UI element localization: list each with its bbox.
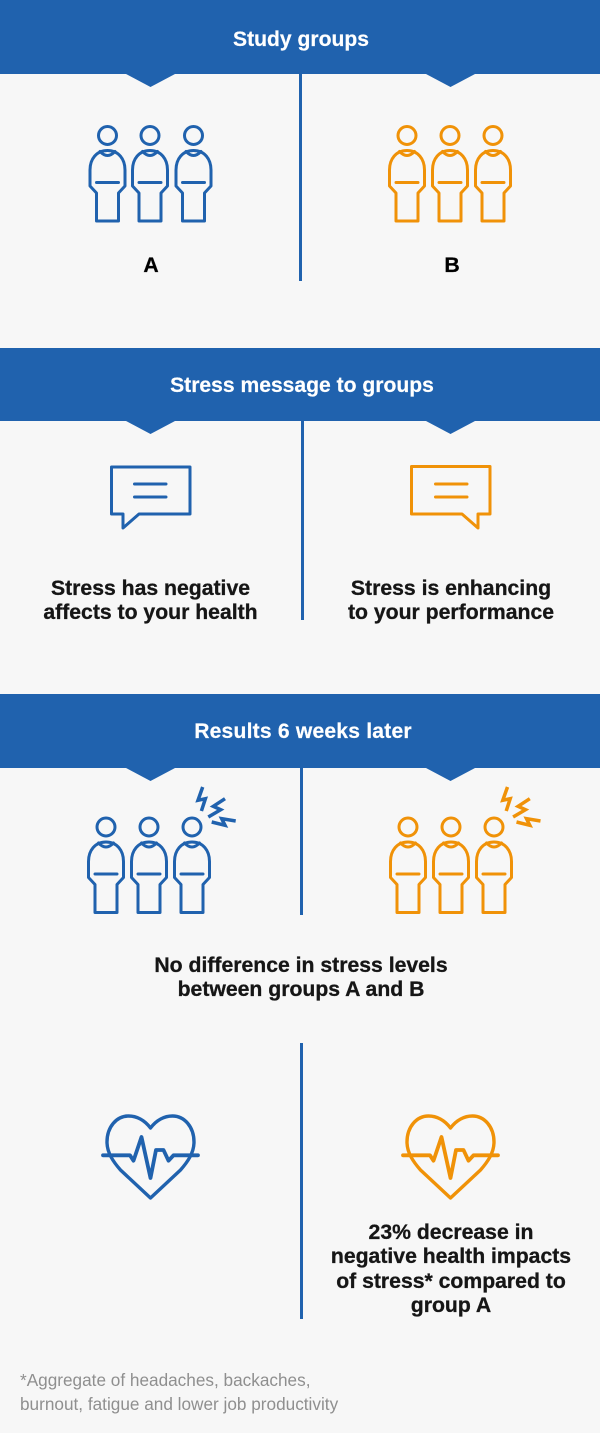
pointer: message B (426, 421, 475, 434)
icon: message bubble B (412, 466, 490, 528)
icon: group B people (390, 126, 510, 221)
header band: results (0, 694, 600, 768)
icon: results B people with stress bolts (390, 787, 540, 912)
header band: results: Results 6 weeks later (194, 720, 412, 743)
icon: results A people with stress bolts (88, 787, 236, 912)
text: health result: negative health impacts (331, 1245, 571, 1268)
header band: study groups (0, 0, 600, 74)
text: no difference: between groups A and B (178, 978, 424, 1001)
header band: stress message: Stress message to groups (170, 374, 434, 397)
header band: study groups: Study groups (233, 28, 369, 51)
text: health result: group A (411, 1294, 491, 1317)
text: no difference (154, 954, 448, 1001)
pointer: study group B (426, 74, 475, 87)
text: message B (348, 577, 554, 624)
pointer: results B (426, 768, 475, 781)
divider: stress message (301, 421, 304, 620)
icon: heart B (403, 1116, 498, 1198)
header band: stress message (0, 348, 600, 421)
text: message A: Stress has negative (51, 577, 250, 600)
text: health result (331, 1221, 571, 1317)
footnote (20, 1370, 338, 1414)
divider: results (300, 768, 303, 915)
text: message B: to your performance (348, 601, 554, 624)
pointer: study group A (126, 74, 175, 87)
divider: study groups (299, 74, 302, 281)
text: message B: Stress is enhancing (351, 577, 551, 600)
label: group B: B (444, 254, 460, 277)
pointer: message A (126, 421, 175, 434)
divider: health results (300, 1043, 303, 1319)
icon: group A people (90, 126, 211, 221)
label: group A: A (143, 254, 159, 277)
text: health result: of stress* compared to (336, 1270, 566, 1293)
text: health result: 23% decrease in (369, 1221, 533, 1244)
text: message A: affects to your health (43, 601, 258, 624)
footnote: burnout, fatigue and lower job productivity (20, 1394, 338, 1414)
icon: heart A (103, 1116, 198, 1198)
pointer: results A (126, 768, 175, 781)
icon: message bubble A (112, 467, 190, 528)
text: message A (43, 577, 258, 624)
footnote: *Aggregate of headaches, backaches, (20, 1370, 310, 1390)
text: no difference: No difference in stress levels (154, 954, 448, 977)
